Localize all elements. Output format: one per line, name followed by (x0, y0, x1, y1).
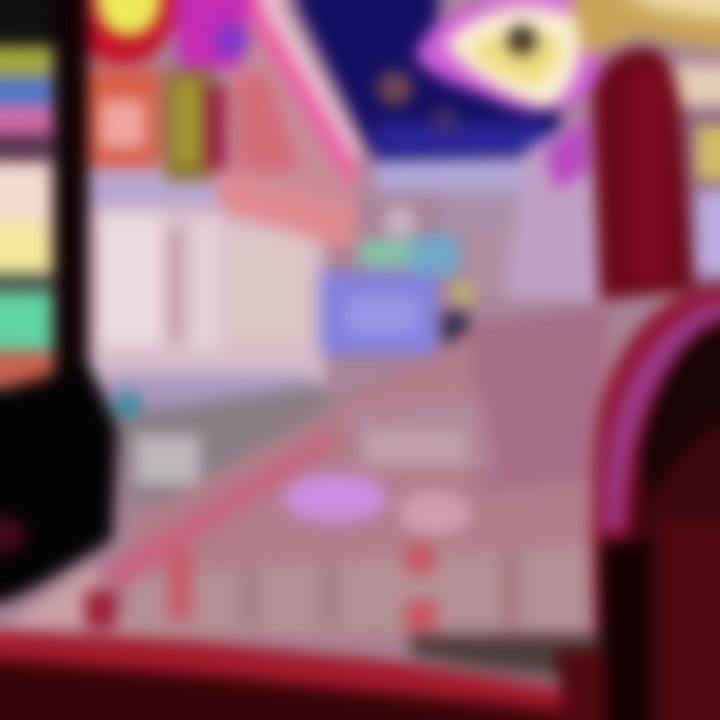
red aisle edge and markers (85, 430, 436, 632)
left slot machine screens (0, 0, 58, 386)
purple glow on aisle (283, 474, 471, 535)
distant back wall (375, 110, 600, 300)
pink floor aisle (0, 305, 610, 640)
black pillar and cabinet (0, 0, 142, 605)
eye-shaped ceiling light (415, 0, 600, 111)
machine bank, centre left (90, 160, 340, 505)
top left coloured signage (85, 0, 250, 180)
navy ceiling (295, 0, 560, 160)
gold top right light (570, 0, 720, 298)
red seat back, right (592, 285, 720, 720)
pink wedge under ceiling stripe (215, 0, 365, 250)
central blue screen (320, 206, 476, 354)
dark red pillar (592, 48, 694, 300)
red arc with yellow light (52, 0, 175, 63)
red counter band, bottom (0, 630, 605, 720)
